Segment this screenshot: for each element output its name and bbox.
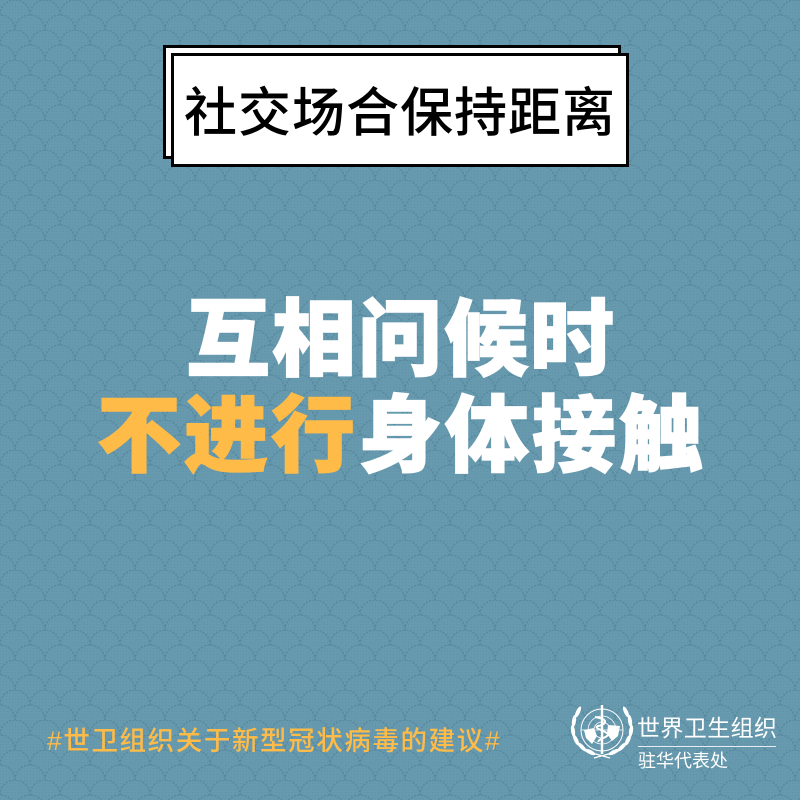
- back card: [163, 45, 621, 159]
- front card: [171, 53, 629, 167]
- WHO name: 世界卫生组织: [637, 715, 777, 741]
- title text: 社交场合保持距离: [184, 84, 616, 143]
- highlighted words: 不进行: [97, 389, 358, 483]
- title card: [163, 45, 629, 167]
- line 2: [97, 389, 706, 483]
- WHO divider: [638, 746, 776, 747]
- icon: WHO emblem: [570, 705, 634, 759]
- hashtag footer: #世卫组织关于新型冠状病毒的建议#: [47, 726, 501, 756]
- main message: [97, 293, 706, 483]
- WHO office: 驻华代表处: [638, 751, 728, 771]
- line 1: 互相问候时: [186, 293, 616, 387]
- white words: 身体接触: [358, 389, 706, 483]
